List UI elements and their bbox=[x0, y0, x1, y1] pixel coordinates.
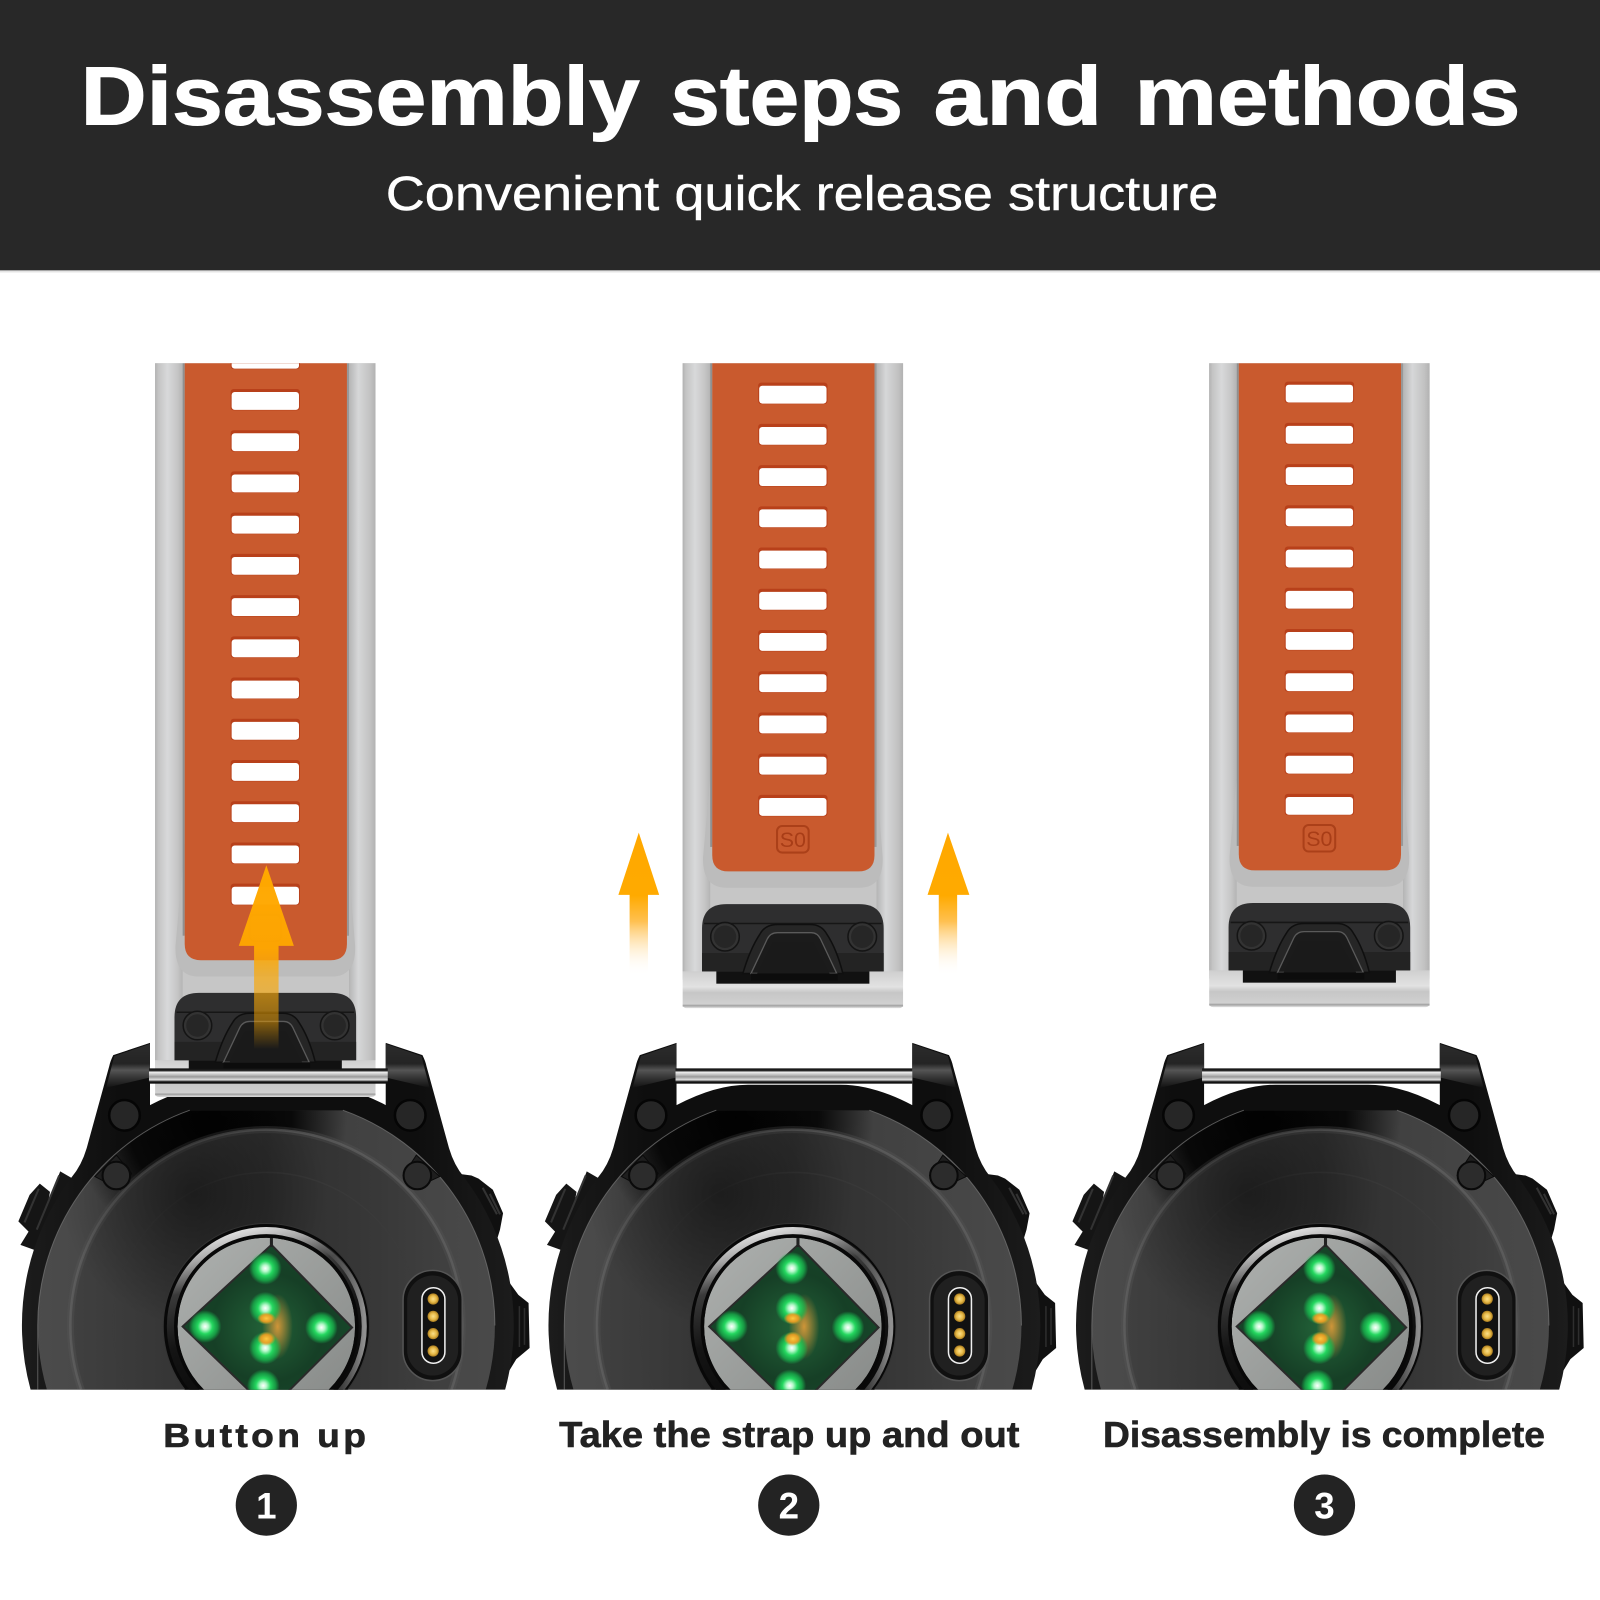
arrow: step 2 right up bbox=[928, 833, 969, 976]
watch 2 bbox=[544, 1042, 1056, 1390]
watch 1 bbox=[18, 1042, 530, 1390]
step badge 3 bbox=[1294, 1474, 1355, 1536]
strap 3 removed bbox=[1209, 363, 1430, 1008]
arrow: step 2 left up bbox=[618, 833, 659, 976]
title: methods bbox=[1135, 49, 1520, 142]
title: and bbox=[934, 49, 1102, 142]
caption 3: Disassembly is complete bbox=[1103, 1415, 1545, 1455]
spring bar 1 bbox=[149, 1068, 388, 1084]
step badge 2 bbox=[758, 1474, 819, 1536]
step badge 2: 2 bbox=[779, 1485, 799, 1526]
strap 2 lifted out bbox=[682, 363, 904, 1008]
step badge 1 bbox=[236, 1474, 297, 1536]
size mark 2: S0 bbox=[780, 828, 806, 852]
size mark 3: S0 bbox=[1306, 827, 1333, 851]
spring bar 3 bbox=[1202, 1068, 1441, 1084]
spring bar 2 bbox=[676, 1068, 912, 1084]
step badge 1: 1 bbox=[256, 1485, 277, 1526]
strap 1 attached to watch bbox=[155, 293, 376, 1097]
header band bbox=[0, 0, 1600, 272]
title bbox=[81, 49, 1520, 142]
arrow: step 1 up bbox=[239, 865, 294, 1049]
subtitle: Convenient quick release structure bbox=[386, 168, 1218, 221]
caption 2: Take the strap up and out bbox=[559, 1415, 1019, 1455]
caption 1: Button up bbox=[163, 1418, 369, 1455]
step badge 3: 3 bbox=[1314, 1485, 1335, 1526]
watch 3 bbox=[1072, 1042, 1584, 1390]
title: steps bbox=[670, 49, 903, 142]
title: Disassembly bbox=[81, 49, 640, 142]
